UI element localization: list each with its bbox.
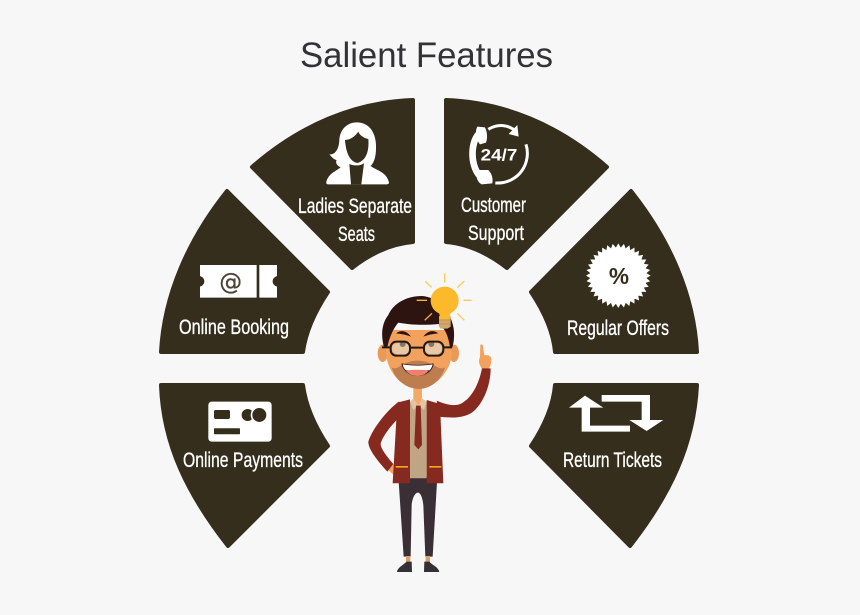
ears [378,345,388,362]
beard [392,361,445,389]
icon: discount badge: % [609,263,629,289]
hair [382,296,454,347]
collar [410,398,427,410]
label: online payments: Online Payments [183,449,303,472]
label: seats: Seats [338,223,375,246]
legs [398,477,437,557]
icon: return arrows [569,395,663,432]
glasses [382,342,452,356]
brows [396,331,438,337]
icon: credit card [208,402,272,442]
panel: online payments [161,385,328,546]
tie [414,406,422,449]
arms [368,401,399,472]
mouth [401,363,434,376]
shoes [397,562,439,572]
panel: customer support [446,100,607,268]
panel: regular offers [531,191,697,352]
raised hand [479,344,491,369]
left hand [387,464,394,475]
icon: 24/7 phone: 24/7 [481,146,517,165]
neck [413,387,422,406]
panel: ladies separate seats [252,100,413,268]
label: support: Support [468,222,524,245]
panel: return tickets [531,385,697,546]
shirt [410,402,427,478]
icon: ticket: @ [219,269,242,295]
title: Salient Features [300,36,553,75]
face [386,330,452,389]
character: man with light bulb idea [368,273,491,572]
icon: light bulb [417,273,472,329]
pockets [396,466,441,468]
icon: woman [326,122,389,184]
icon: ticket [200,265,277,298]
eyes [392,342,409,355]
label: ladies separate: Ladies Separate [298,195,412,218]
label: customer: Customer [461,194,526,217]
label: online booking: Online Booking [179,316,289,339]
jacket [393,399,443,483]
icon: 24/7 phone [473,125,527,184]
panel: online booking [161,191,328,352]
icon: discount badge [586,233,661,313]
label: return tickets: Return Tickets [563,449,662,472]
label: regular offers: Regular Offers [567,317,669,340]
